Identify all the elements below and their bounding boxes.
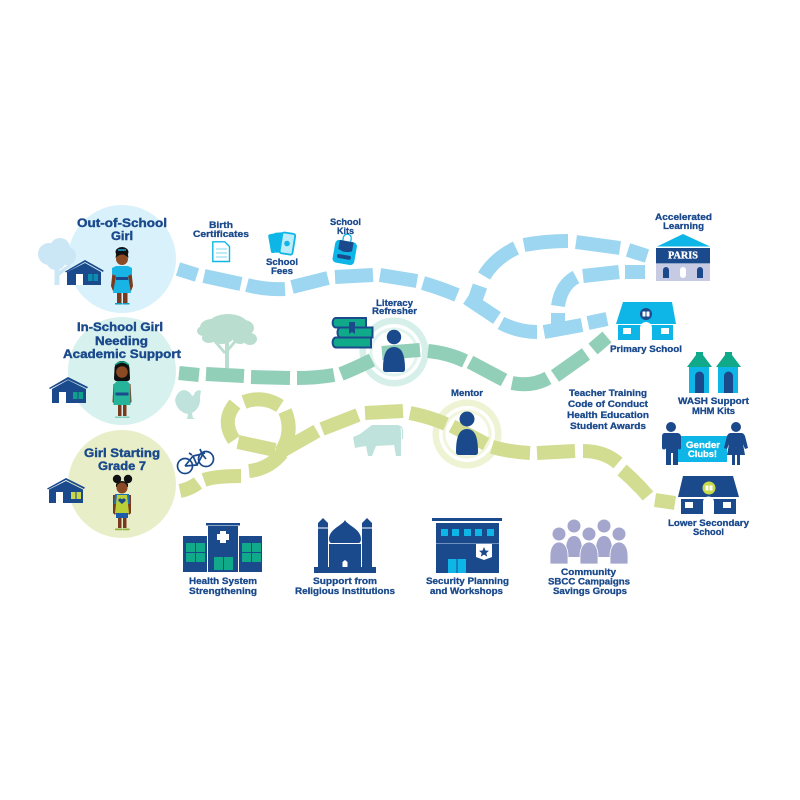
heading: out-of-school girl bbox=[77, 216, 167, 243]
label: gender clubs bbox=[686, 440, 720, 460]
icon: birth certificate document bbox=[213, 242, 230, 262]
heading: girl starting grade 7: Grade 7 bbox=[98, 459, 146, 473]
label: gender clubs: Gender bbox=[686, 440, 720, 451]
icon: school kit backpack bbox=[332, 232, 359, 266]
label: mentor: Mentor bbox=[451, 388, 483, 399]
label: school kits bbox=[330, 217, 361, 237]
label: religious institutions: Support from bbox=[313, 576, 377, 587]
label: religious institutions: Religious Institutions bbox=[295, 586, 395, 597]
woman figure bbox=[724, 422, 748, 465]
label: security planning: Security Planning bbox=[426, 576, 509, 587]
heading: girl starting grade 7: Girl Starting bbox=[84, 446, 160, 460]
person: mentor bbox=[456, 412, 478, 455]
label: literacy refresher bbox=[372, 298, 417, 317]
icon: security building bbox=[432, 518, 502, 573]
label: school fees bbox=[266, 257, 298, 277]
label: WASH support: MHM Kits bbox=[692, 406, 735, 417]
label: community: SBCC Campaigns bbox=[548, 576, 630, 588]
girl: out-of-school bbox=[111, 247, 133, 304]
text block: teacher support list bbox=[567, 388, 649, 432]
label: school kits: School bbox=[330, 217, 361, 228]
label: community: Savings Groups bbox=[553, 586, 627, 597]
label: birth certificates: Birth bbox=[209, 220, 233, 231]
label: literacy refresher: Refresher bbox=[372, 306, 417, 317]
heading: in-school girl: In-School Girl bbox=[77, 320, 163, 334]
icon: gender clubs banner bbox=[662, 422, 748, 465]
man figure bbox=[662, 422, 681, 465]
heading: in-school girl: Academic Support bbox=[63, 347, 181, 361]
icon: stack of books bbox=[333, 318, 372, 348]
text block: teacher support list: Health Education bbox=[567, 410, 649, 421]
text block: teacher support list: Teacher Training bbox=[569, 388, 647, 399]
label: Paris: PARIS bbox=[668, 250, 698, 262]
label: community: Community bbox=[561, 567, 617, 578]
heading: in-school girl: Needing bbox=[95, 334, 148, 348]
label: WASH support: WASH Support bbox=[678, 396, 750, 407]
heading: out-of-school girl: Out-of-School bbox=[77, 216, 167, 230]
label: school fees: Fees bbox=[271, 266, 293, 277]
label: accelerated learning: Learning bbox=[663, 221, 704, 232]
circle: out-of-school girl bbox=[68, 205, 176, 313]
circle: in-school girl bbox=[68, 317, 176, 425]
icon: lower secondary school bbox=[678, 476, 739, 514]
label: security planning bbox=[426, 576, 509, 597]
text block: teacher support list: Code of Conduct bbox=[568, 399, 649, 410]
label: birth certificates: Certificates bbox=[193, 229, 249, 240]
icon: mosque bbox=[314, 518, 376, 573]
heading: girl starting grade 7 bbox=[84, 446, 160, 473]
circle: girl starting grade 7 bbox=[68, 430, 176, 538]
icon: accelerated learning school bbox=[656, 234, 710, 281]
label: accelerated learning bbox=[655, 212, 712, 232]
path: out-of-school blue route bbox=[178, 241, 647, 332]
person: literacy mentor bbox=[383, 330, 405, 372]
label: lower secondary school: Lower Secondary bbox=[668, 518, 750, 529]
icon: home one bbox=[65, 260, 104, 285]
girl: starting grade 7 bbox=[113, 475, 132, 530]
label: health system: Health System bbox=[189, 576, 257, 587]
label: birth certificates bbox=[193, 220, 249, 240]
label: school kits: Kits bbox=[337, 226, 354, 237]
heading: in-school girl bbox=[63, 320, 181, 361]
label: accelerated learning: Accelerated bbox=[655, 212, 712, 223]
girl: in-school bbox=[112, 361, 132, 418]
icon: cow bbox=[353, 425, 403, 456]
icon: home two bbox=[49, 377, 88, 403]
label: literacy refresher: Literacy bbox=[376, 298, 414, 309]
rings: mentor bbox=[432, 400, 502, 468]
icon: school fees banknotes bbox=[269, 232, 295, 255]
icon: bicycle bbox=[178, 449, 214, 474]
text block: teacher support list: Student Awards bbox=[570, 421, 646, 432]
path: in-school green route bbox=[179, 337, 607, 384]
path: grade 7 olive route bbox=[180, 399, 675, 503]
icon: home three bbox=[47, 478, 85, 503]
label: school fees: School bbox=[266, 257, 298, 268]
icon: pale blue tree bbox=[38, 238, 76, 285]
label: lower secondary school bbox=[668, 518, 750, 538]
label: security planning: and Workshops bbox=[430, 586, 503, 597]
icon: hospital bbox=[183, 523, 262, 572]
icon: community group bbox=[550, 520, 628, 564]
heading: out-of-school girl: Girl bbox=[111, 229, 133, 243]
label: health system: Strengthening bbox=[189, 586, 257, 597]
label: community bbox=[548, 567, 630, 597]
icon: chicken bbox=[175, 390, 201, 419]
label: lower secondary school: School bbox=[693, 527, 724, 538]
label: WASH support bbox=[678, 396, 750, 417]
rings: literacy refresher bbox=[360, 318, 428, 386]
label: health system bbox=[189, 576, 257, 597]
icon: primary school bbox=[616, 302, 676, 340]
icon: WASH latrines bbox=[687, 352, 741, 393]
icon: acacia tree bbox=[197, 314, 257, 368]
label: primary school: Primary School bbox=[610, 344, 682, 355]
label: gender clubs: Clubs! bbox=[688, 449, 717, 460]
label: religious institutions bbox=[295, 576, 395, 597]
